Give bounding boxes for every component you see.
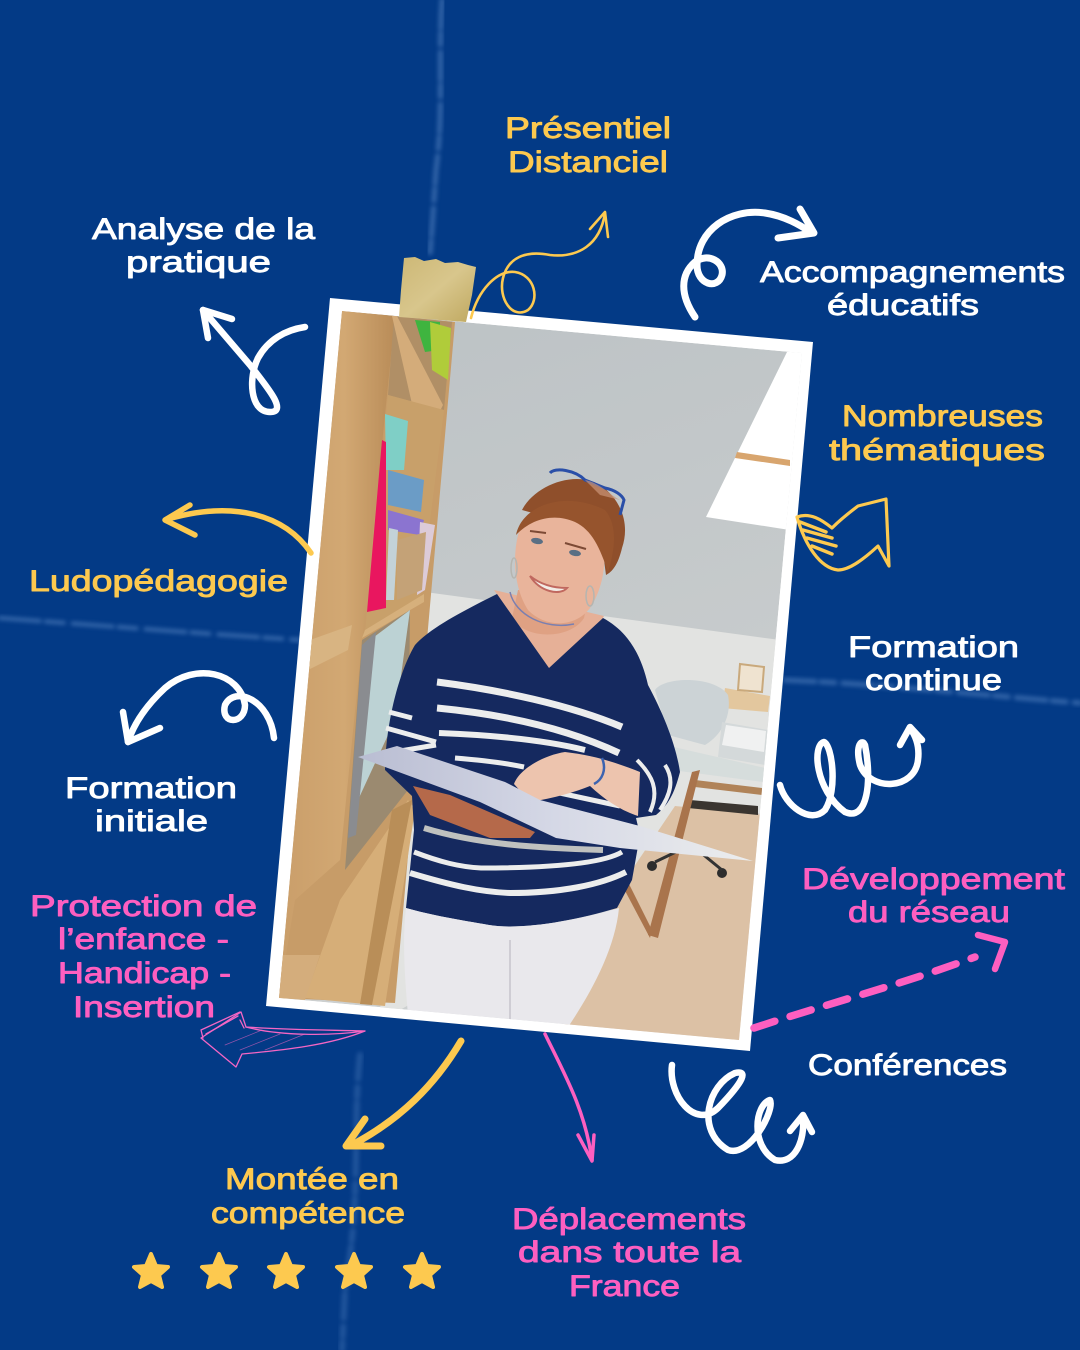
tape xyxy=(399,257,476,322)
left forearm xyxy=(413,786,535,838)
hair back xyxy=(522,479,625,575)
woman xyxy=(358,470,753,1030)
label: Formation continue: continue xyxy=(865,664,1002,697)
bookcase xyxy=(268,311,455,1006)
eyes and smile xyxy=(531,538,543,544)
label: Déplacements dans toute la France: Déplacements xyxy=(512,1203,746,1236)
label: Nombreuses thématiques: thématiques xyxy=(829,434,1045,467)
label: Présentiel Distanciel xyxy=(505,112,671,179)
arrow: montée en compétence xyxy=(346,1041,461,1146)
label: Présentiel Distanciel: Distanciel xyxy=(508,146,668,179)
trousers xyxy=(404,908,619,1030)
face xyxy=(515,514,604,623)
hand and right forearm xyxy=(514,752,640,816)
glasses xyxy=(550,470,624,515)
label: Protection de l'enfance: Insertion xyxy=(73,991,215,1024)
arrow: accompagnements xyxy=(684,209,814,317)
earrings xyxy=(511,558,517,578)
floor xyxy=(560,806,765,1045)
five stars rating xyxy=(134,1254,439,1287)
label: Développement du réseau: Développement xyxy=(802,863,1066,896)
photograph xyxy=(268,311,806,1045)
sweater stripes xyxy=(386,682,670,893)
neck and chest xyxy=(494,590,604,670)
label: Développement du réseau: du réseau xyxy=(848,896,1010,929)
label: Présentiel Distanciel: Présentiel xyxy=(505,112,671,145)
label: Formation initiale: Formation xyxy=(65,772,237,805)
label: Nombreuses thématiques: Nombreuses xyxy=(842,400,1043,433)
arrow: ludopédagogie xyxy=(165,505,311,553)
label: Analyse de la pratique: Analyse de la xyxy=(92,213,315,246)
label: Ludopédagogie: Ludopédagogie xyxy=(29,565,288,598)
arrow: formation initiale xyxy=(123,673,274,742)
necklace xyxy=(510,592,574,625)
arrow: développement dashed xyxy=(754,935,1005,1028)
shelf objects xyxy=(415,320,440,352)
wall xyxy=(279,311,802,1040)
label: Analyse de la pratique xyxy=(92,213,315,279)
label: Accompagnements éducatifs: éducatifs xyxy=(827,289,979,322)
label: Protection de l'enfance xyxy=(30,890,257,1024)
white frame xyxy=(266,298,813,1051)
label: Protection de l'enfance: Handicap - xyxy=(58,957,231,990)
lower white wall xyxy=(380,592,780,1010)
label: Montée en compétence xyxy=(211,1163,405,1230)
arrow: analyse xyxy=(203,310,305,412)
hair fringe xyxy=(516,512,604,562)
arrow: conférences xyxy=(672,1065,812,1161)
label: Protection de l'enfance: l’enfance - xyxy=(58,923,229,956)
label: Déplacements dans toute la France: dans toute la xyxy=(518,1236,741,1269)
label: Déplacements dans toute la France: France xyxy=(569,1270,680,1303)
label: Formation continue: Formation xyxy=(848,631,1019,664)
label: Montée en compétence: Montée en xyxy=(225,1163,399,1196)
arrow: thématiques sketch xyxy=(797,499,889,570)
label: Analyse de la pratique: pratique xyxy=(126,246,271,279)
label: Montée en compétence: compétence xyxy=(211,1197,405,1230)
label: Formation initiale xyxy=(65,772,237,838)
arrow: déplacements xyxy=(545,1034,594,1161)
back desk xyxy=(622,664,770,938)
label: Accompagnements éducatifs xyxy=(760,256,1065,322)
label: Formation initiale: initiale xyxy=(95,805,208,838)
label: Développement du réseau xyxy=(802,863,1066,929)
arrow: formation continue xyxy=(780,727,922,815)
label: Formation continue xyxy=(848,631,1019,697)
skylight xyxy=(706,352,806,530)
label: Nombreuses thématiques xyxy=(829,400,1045,467)
arrow: protection sketch xyxy=(201,1012,365,1067)
label: Conférences: Conférences xyxy=(808,1049,1007,1082)
label: Protection de l'enfance: Protection de xyxy=(30,890,257,923)
sweater body xyxy=(385,594,680,926)
folder xyxy=(358,746,753,861)
photo frame xyxy=(266,298,813,1051)
label: Déplacements dans toute la France xyxy=(512,1203,746,1303)
arrow: présentiel xyxy=(471,212,608,318)
label: Accompagnements éducatifs: Accompagnements xyxy=(760,256,1065,289)
